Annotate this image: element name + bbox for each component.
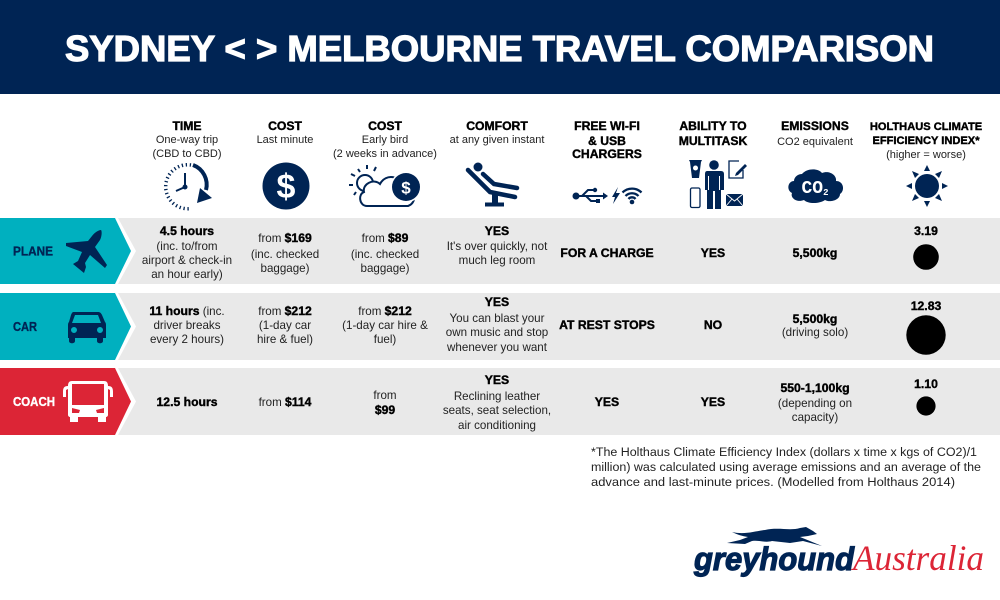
footnote xyxy=(591,445,981,489)
icon: sun xyxy=(906,165,948,207)
column header: cost early bird: COST xyxy=(368,119,402,133)
icon: CO2 cloud: 2 xyxy=(823,188,829,198)
row: coach: 12.5 hours xyxy=(157,395,218,409)
column header: wifi and usb xyxy=(572,119,642,204)
row: car: whenever you want xyxy=(446,341,548,354)
row: plane: from $89 xyxy=(362,231,409,245)
column header: time xyxy=(152,119,222,209)
index circle: plane xyxy=(913,244,939,270)
icon: CO2 cloud: CO xyxy=(801,179,823,199)
row: car: hire & fuel) xyxy=(257,333,313,346)
row: plane: (inc. to/from xyxy=(156,240,218,253)
row: plane: FOR A CHARGE xyxy=(560,246,654,260)
row: plane xyxy=(0,218,1000,284)
column header: climate index xyxy=(870,121,982,207)
row: plane: (inc. checked xyxy=(351,248,419,261)
row: car: 11 hours (inc. xyxy=(149,304,225,318)
row: coach: YES xyxy=(595,395,619,409)
index circle: coach xyxy=(916,396,936,416)
row label: plane xyxy=(0,218,131,284)
column header: climate index: (higher = worse) xyxy=(886,149,966,161)
row label: coach: COACH xyxy=(13,394,55,409)
row: plane: baggage) xyxy=(360,262,410,275)
row: plane: airport & check-in xyxy=(142,254,232,267)
column header: time: TIME xyxy=(172,119,202,133)
row: plane: YES xyxy=(701,246,725,260)
row label: coach xyxy=(0,368,131,435)
row: car: driver breaks xyxy=(153,319,221,332)
row: plane: (inc. checked xyxy=(251,248,319,261)
row: car: 12.83 xyxy=(911,299,941,313)
row: car: from $212 xyxy=(358,304,412,318)
row: car: every 2 hours) xyxy=(150,333,224,346)
column header: cost last minute: Last minute xyxy=(257,134,313,146)
row: coach: YES xyxy=(701,395,725,409)
icon: sun and cloud with dollar: $ xyxy=(401,178,411,198)
row: coach: Reclining leather xyxy=(454,390,540,403)
row: coach: (depending on xyxy=(778,397,852,410)
title banner xyxy=(0,0,1000,94)
row: coach: $99 xyxy=(375,403,395,417)
row: plane: YES xyxy=(485,224,509,238)
row: plane: 4.5 hours xyxy=(160,224,214,238)
row: plane: from $169 xyxy=(258,231,312,245)
row: plane: 5,500kg xyxy=(793,246,837,260)
column header: cost early bird: Early bird xyxy=(362,134,408,146)
column header: wifi and usb: CHARGERS xyxy=(572,147,642,161)
row: coach: from xyxy=(373,389,397,402)
icon: car xyxy=(68,312,106,343)
index circle: car xyxy=(906,315,946,355)
row: coach: air conditioning xyxy=(458,419,536,432)
icon: plane xyxy=(66,230,107,273)
icon: clock xyxy=(166,165,212,209)
icon: coach bus xyxy=(63,381,113,422)
row: car: (1-day car hire & xyxy=(342,319,428,332)
row: plane: an hour early) xyxy=(151,268,223,281)
logo: greyhound Australia: Australia xyxy=(851,538,984,578)
icon: CO2 cloud xyxy=(788,169,843,203)
logo: greyhound Australia: greyhound xyxy=(693,541,855,577)
row: car: own music and stop xyxy=(446,326,548,339)
row: coach: 550-1,100kg xyxy=(780,381,850,395)
column header: wifi and usb: & USB xyxy=(588,134,626,148)
row: car: You can blast your xyxy=(450,312,545,325)
column header: cost last minute: COST xyxy=(268,119,302,133)
column header: multitask: MULTITASK xyxy=(679,134,747,148)
row label: plane: PLANE xyxy=(13,244,53,258)
icon: reclining chair xyxy=(468,162,517,204)
greyhound dog silhouette xyxy=(727,527,822,546)
row: car: (1-day car xyxy=(259,319,311,332)
row: coach: 1.10 xyxy=(914,377,938,391)
column header: multitask: ABILITY TO xyxy=(679,119,747,133)
row: plane: much leg room xyxy=(459,254,535,267)
row: coach: from $114 xyxy=(259,395,312,409)
row label: car xyxy=(0,293,131,360)
title banner: SYDNEY < > MELBOURNE TRAVEL COMPARISON xyxy=(65,28,934,69)
row: coach xyxy=(0,368,1000,435)
column header: comfort: at any given instant xyxy=(450,134,544,146)
icon: usb, bolt, wifi xyxy=(572,187,642,204)
icon: person with multitasking items xyxy=(689,160,747,209)
row: car: (driving solo) xyxy=(782,326,848,339)
column header: climate index: EFFICIENCY INDEX* xyxy=(872,135,980,147)
column header: comfort: COMFORT xyxy=(466,119,528,133)
logo: greyhound Australia xyxy=(693,527,984,578)
column header: comfort xyxy=(450,119,544,204)
row: plane: 3.19 xyxy=(914,224,938,238)
row: coach: seats, seat selection, xyxy=(443,404,551,417)
column header: time: (CBD to CBD) xyxy=(152,148,222,160)
column header: cost last minute xyxy=(257,119,313,210)
column header: multitask xyxy=(679,119,747,209)
row: coach: YES xyxy=(485,373,509,387)
row: coach: capacity) xyxy=(792,411,838,424)
row: car: from $212 xyxy=(258,304,312,318)
row: car: fuel) xyxy=(374,333,396,346)
footnote: million) was calculated using average emissions and an average of the xyxy=(591,460,981,474)
icon: dollar coin: $ xyxy=(277,168,296,206)
column header: climate index: HOLTHAUS CLIMATE xyxy=(870,121,982,133)
column header: emissions: CO2 equivalent xyxy=(777,136,853,148)
row: car xyxy=(0,293,1000,360)
footnote: *The Holthaus Climate Efficiency Index (dollars x time x kgs of CO2)/1 xyxy=(591,445,977,459)
column header: cost early bird: (2 weeks in advance) xyxy=(333,148,437,160)
row: car: NO xyxy=(704,318,722,332)
footnote: advance and last-minute prices. (Modelled from Holthaus 2014) xyxy=(591,475,955,489)
row: car: YES xyxy=(485,295,509,309)
row: plane: It's over quickly, not xyxy=(447,240,548,253)
column header: wifi and usb: FREE WI-FI xyxy=(574,119,640,133)
row: plane: baggage) xyxy=(260,262,310,275)
column header: emissions xyxy=(777,119,853,203)
row: car: 5,500kg xyxy=(793,312,837,326)
column header: emissions: EMISSIONS xyxy=(781,119,849,133)
column header: time: One-way trip xyxy=(156,134,218,146)
column header: cost early bird xyxy=(333,119,437,206)
row: car: AT REST STOPS xyxy=(559,318,655,332)
row label: car: CAR xyxy=(13,319,38,334)
